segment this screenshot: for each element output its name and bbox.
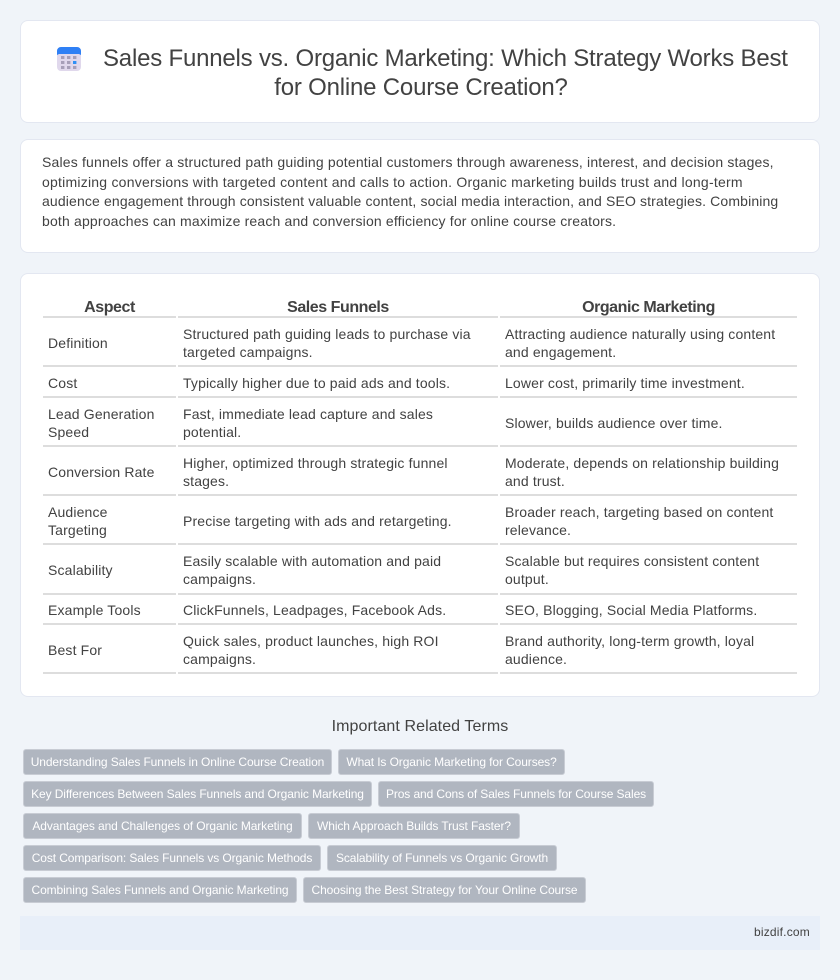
icon: calendar — [57, 47, 81, 71]
tag — [308, 813, 520, 839]
footer bar — [20, 916, 820, 950]
tag: Which Approach Builds Trust Faster? — [317, 819, 511, 833]
title: for Online Course Creation? — [274, 74, 568, 101]
comparison table: ClickFunnels, Leadpages, Facebook Ads. — [183, 602, 446, 618]
intro paragraph: audience engagement through consistent valuable content, social media interaction, and SEO strategies. Combining — [42, 193, 778, 209]
comparison table: Structured path guiding leads to purchase via — [183, 326, 471, 342]
comparison table: Sales Funnels — [287, 299, 389, 316]
tag group: related terms — [23, 749, 654, 903]
comparison table: Typically higher due to paid ads and tools. — [183, 375, 450, 391]
tag — [338, 749, 565, 775]
comparison table: Audience — [48, 504, 108, 520]
intro paragraph: both approaches can maximize reach and conversion efficiency for online course creators. — [42, 213, 616, 229]
comparison table: Fast, immediate lead capture and sales — [183, 406, 433, 422]
comparison table: Conversion Rate — [48, 464, 155, 480]
title — [103, 45, 788, 101]
tag: Advantages and Challenges of Organic Marketing — [32, 819, 293, 833]
tag — [23, 781, 372, 807]
intro paragraph: optimizing conversions with targeted content and calls to action. Organic marketing builds trust and long-term — [42, 174, 743, 190]
comparison table: Scalable but requires consistent content — [505, 552, 759, 568]
comparison table: Moderate, depends on relationship building — [505, 455, 779, 471]
tag: Choosing the Best Strategy for Your Online Course — [312, 883, 577, 897]
comparison table: Targeting — [48, 522, 107, 538]
tag: Understanding Sales Funnels in Online Course Creation — [31, 755, 324, 769]
tag: Key Differences Between Sales Funnels and Organic Marketing — [31, 787, 364, 801]
comparison table: stages. — [183, 473, 229, 489]
comparison table: and trust. — [505, 473, 565, 489]
tag: Pros and Cons of Sales Funnels for Course Sales — [386, 787, 646, 801]
comparison table: Lower cost, primarily time investment. — [505, 375, 745, 391]
comparison table — [43, 299, 797, 674]
comparison table: Quick sales, product launches, high ROI — [183, 633, 439, 649]
comparison table: Precise targeting with ads and retargeting. — [183, 513, 452, 529]
tag — [23, 813, 302, 839]
comparison table: campaigns. — [183, 570, 256, 586]
tag — [327, 845, 557, 871]
comparison table: targeted campaigns. — [183, 344, 313, 360]
tag — [23, 749, 332, 775]
comparison table: Broader reach, targeting based on content — [505, 504, 773, 520]
comparison table: potential. — [183, 424, 241, 440]
comparison table: SEO, Blogging, Social Media Platforms. — [505, 602, 757, 618]
tag — [303, 877, 586, 903]
comparison table: Organic Marketing — [582, 299, 715, 316]
panel: title card — [20, 20, 820, 123]
comparison table: audience. — [505, 651, 567, 667]
intro paragraph — [42, 154, 778, 229]
comparison table: Easily scalable with automation and paid — [183, 552, 441, 568]
tag — [23, 877, 297, 903]
comparison table: Aspect — [84, 299, 135, 316]
panel: introduction text — [20, 139, 820, 253]
comparison table: Brand authority, long-term growth, loyal — [505, 633, 754, 649]
comparison table: output. — [505, 570, 549, 586]
comparison table: campaigns. — [183, 651, 256, 667]
heading: related terms: Important Related Terms — [332, 718, 508, 735]
tag — [23, 845, 321, 871]
tag: Scalability of Funnels vs Organic Growth — [336, 851, 548, 865]
tag — [378, 781, 654, 807]
comparison table: and engagement. — [505, 344, 616, 360]
footer source label: bizdif.com — [754, 925, 810, 939]
comparison table: Cost — [48, 375, 77, 391]
intro paragraph: Sales funnels offer a structured path guiding potential customers through awareness, interest, and decision stages, — [42, 154, 774, 170]
comparison table: Higher, optimized through strategic funnel — [183, 455, 448, 471]
panel: comparison table — [20, 273, 820, 697]
comparison table: relevance. — [505, 522, 571, 538]
comparison table: Example Tools — [48, 602, 141, 618]
comparison table: Definition — [48, 335, 108, 351]
comparison table: Best For — [48, 642, 102, 658]
comparison table: Lead Generation — [48, 406, 155, 422]
title: Sales Funnels vs. Organic Marketing: Which Strategy Works Best — [103, 45, 788, 72]
comparison table: Slower, builds audience over time. — [505, 415, 723, 431]
comparison table: Attracting audience naturally using content — [505, 326, 775, 342]
tag: Cost Comparison: Sales Funnels vs Organic Methods — [32, 851, 312, 865]
tag: What Is Organic Marketing for Courses? — [346, 755, 557, 769]
comparison table: Speed — [48, 424, 89, 440]
comparison table: Scalability — [48, 562, 113, 578]
tag: Combining Sales Funnels and Organic Marketing — [32, 883, 288, 897]
